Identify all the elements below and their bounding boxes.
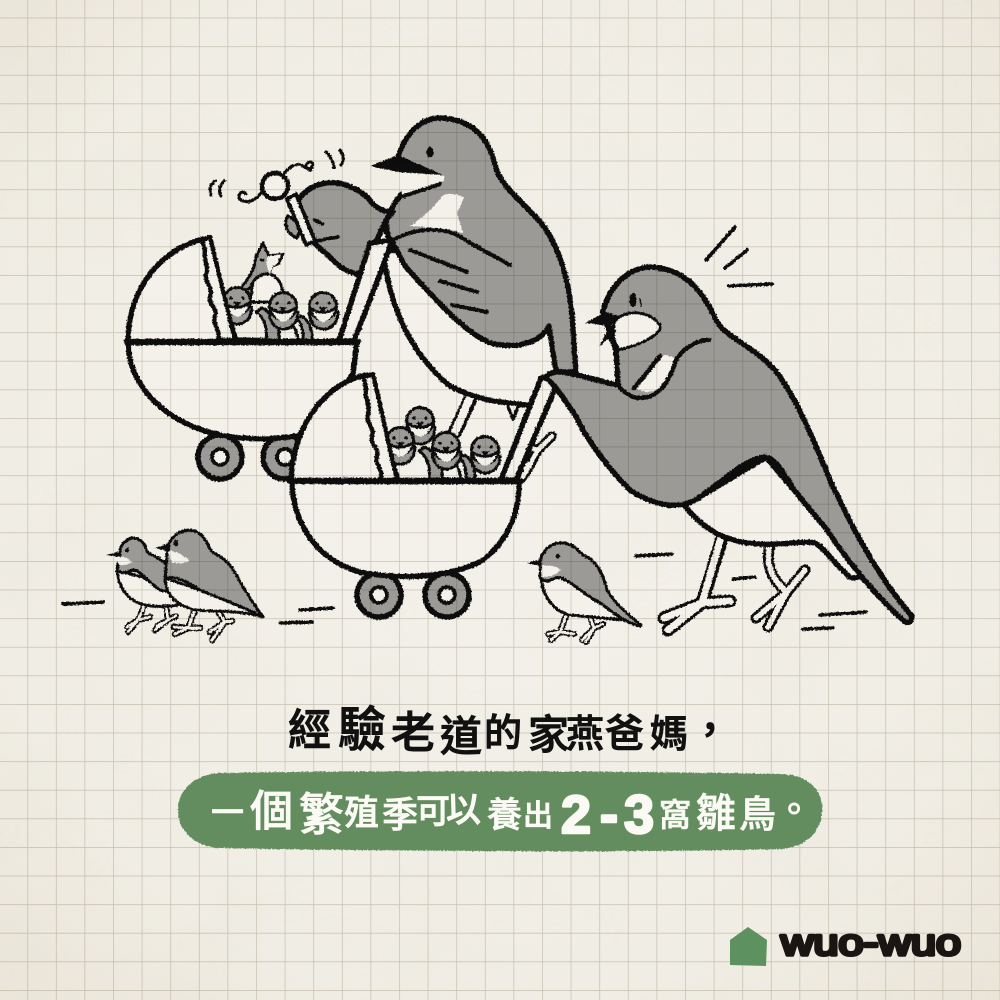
stroller two wheels	[357, 573, 469, 617]
small bird one	[106, 538, 182, 632]
banner text: 一	[211, 794, 244, 831]
banner pill	[178, 771, 822, 851]
grey body of parent two	[546, 267, 912, 622]
grey body of parent one	[386, 118, 576, 372]
throat of parent two	[613, 313, 660, 350]
eye of parent one	[426, 146, 434, 158]
banner text: 殖	[344, 794, 379, 833]
banner text: 養	[487, 796, 522, 835]
stroller one rim	[127, 339, 358, 345]
motion lines	[63, 227, 866, 629]
logo house icon	[730, 927, 767, 966]
stroller two frill and hood edge	[364, 374, 397, 480]
triangle under belly	[507, 404, 519, 419]
heading line one: 爸	[605, 713, 644, 756]
heading line one: 經	[288, 707, 331, 755]
banner text: 季	[382, 794, 418, 835]
chicks in stroller two	[386, 408, 500, 479]
banner text: 以	[446, 791, 481, 830]
wing finger lines	[315, 220, 338, 241]
small bird two	[155, 530, 263, 640]
wing shoulder line	[618, 340, 709, 398]
banner text: 個	[250, 788, 293, 836]
green banner	[178, 771, 822, 851]
stroller one wheels	[198, 435, 307, 479]
banner text end: 鳥	[739, 794, 776, 835]
chest patch	[410, 194, 464, 233]
small bird three	[527, 543, 641, 642]
belly of parent two	[684, 457, 862, 578]
stroller one frill and hood edge	[202, 237, 235, 340]
raised wing of parent one	[296, 183, 393, 274]
heading line one: 的	[484, 713, 522, 755]
parent bird one	[210, 118, 576, 478]
wing feather lines of parent one	[393, 184, 510, 312]
foot of parent one	[518, 436, 552, 478]
heading line one: 驗	[338, 704, 386, 757]
heading line one: ，	[690, 709, 730, 753]
heading line one: 老	[391, 709, 435, 758]
belly of parent one	[383, 250, 576, 405]
stroller one handle	[339, 240, 392, 341]
beak of parent one	[370, 155, 443, 175]
stroller two	[290, 373, 561, 617]
heading line one: 家	[528, 712, 569, 758]
banner text end: 窩	[659, 797, 691, 833]
stroller two handle	[501, 373, 561, 480]
banner text: 可	[416, 793, 450, 831]
banner text end: 雛	[696, 792, 736, 836]
heading line one: 燕	[566, 714, 604, 756]
rattle	[210, 150, 343, 245]
logo wordmark: wuo-wuo	[780, 922, 961, 963]
parent bird two	[546, 267, 912, 630]
finger	[286, 216, 302, 238]
stroller two rim	[290, 478, 521, 484]
stroller two hood	[291, 375, 398, 481]
stroller one hood and basket	[128, 239, 357, 439]
banner text end: 。	[776, 789, 812, 830]
heading line one: 媽	[650, 714, 688, 756]
chicks in stroller one	[224, 288, 338, 340]
stroller two basket	[292, 481, 519, 577]
white wing bar	[636, 356, 676, 392]
fledgling standing in stroller one	[236, 243, 286, 302]
beak of parent two	[585, 312, 620, 347]
leg of parent one	[455, 398, 470, 432]
leg of parent two	[664, 534, 805, 630]
highlighted number: 2-3	[561, 785, 654, 845]
stroller one	[127, 237, 358, 479]
banner text: 繁	[299, 789, 344, 840]
banner text: 出	[523, 800, 553, 833]
throat of parent one	[397, 172, 445, 197]
eye of parent two	[629, 293, 641, 307]
heading line one: 道	[440, 713, 482, 760]
illustration: swallow parents pushing strollers	[63, 118, 912, 642]
logo	[730, 922, 961, 966]
